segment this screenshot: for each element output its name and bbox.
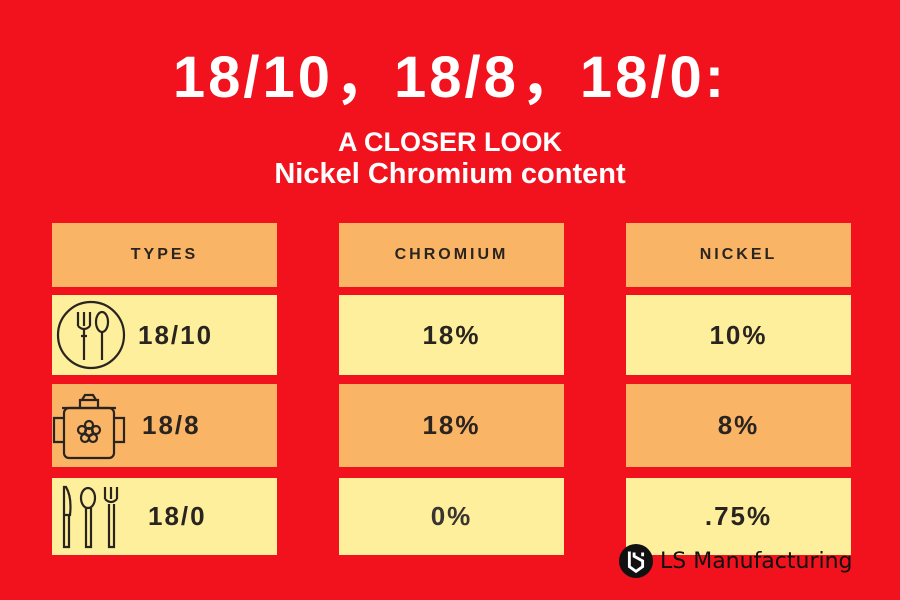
row 18/8 chromium — [339, 384, 564, 467]
logo — [618, 544, 853, 578]
row 18/10 type — [52, 295, 277, 375]
header: chromium — [339, 223, 564, 287]
header: nickel: NICKEL — [700, 246, 777, 263]
header: chromium: CHROMIUM — [395, 246, 508, 263]
header: nickel — [626, 223, 851, 287]
icon: fork and spoon in circle — [56, 300, 126, 370]
subtitle — [274, 127, 626, 190]
row 18/10 chromium: 18% — [422, 320, 481, 350]
icon: sippy cup — [52, 394, 126, 460]
row 18/0 nickel: .75% — [705, 501, 772, 531]
logo: LS Manufacturing — [660, 548, 853, 574]
icon: knife spoon fork — [62, 486, 118, 548]
row 18/10 chromium — [339, 295, 564, 375]
row 18/8 nickel — [626, 384, 851, 467]
row 18/8 type: 18/8 — [142, 410, 201, 440]
row 18/0 type — [52, 478, 277, 555]
row 18/0 chromium — [339, 478, 564, 555]
title: 18/10，18/8，18/0: — [173, 45, 727, 110]
row 18/8 nickel: 8% — [718, 410, 759, 440]
row 18/0 type: 18/0 — [148, 501, 207, 531]
row 18/10 nickel — [626, 295, 851, 375]
subtitle: Nickel Chromium content — [274, 158, 626, 190]
row 18/8 chromium: 18% — [422, 410, 481, 440]
row 18/10 type: 18/10 — [138, 320, 213, 350]
header: types — [52, 223, 277, 287]
row 18/8 type — [52, 384, 277, 467]
header: types: TYPES — [131, 246, 198, 263]
row 18/0 nickel — [626, 478, 851, 555]
row 18/0 chromium: 0% — [431, 501, 472, 531]
icon: logo badge — [618, 544, 654, 578]
subtitle: A CLOSER LOOK — [338, 127, 562, 157]
row 18/10 nickel: 10% — [709, 320, 768, 350]
